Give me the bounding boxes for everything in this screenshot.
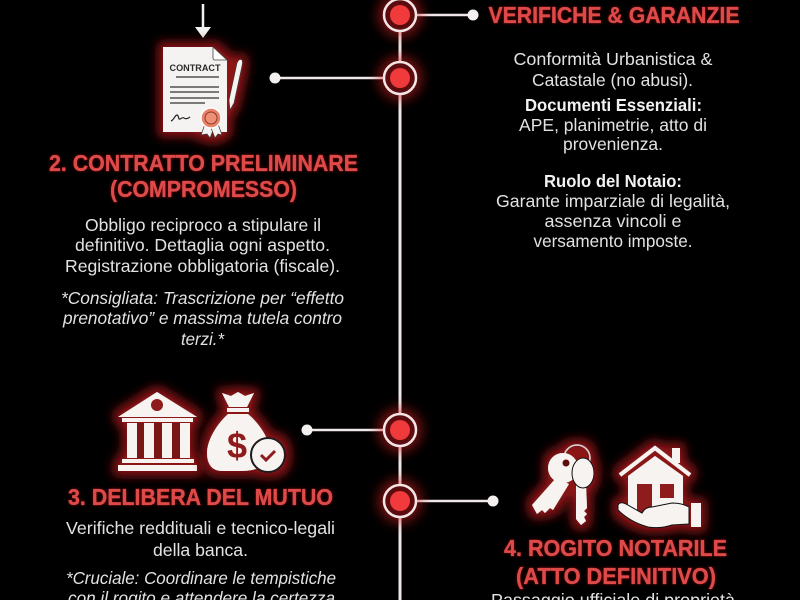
text: step 2 body: Registrazione obbligatoria (fiscale). <box>65 256 340 276</box>
heading: step 4 <box>504 535 727 589</box>
node 3 <box>378 408 422 452</box>
text: step 2 note: *Consigliata: Trascrizione per “effetto <box>61 288 344 308</box>
connector: verifiche <box>400 10 478 20</box>
panel: verifiche e garanzie <box>488 2 740 251</box>
node 1 <box>378 0 422 37</box>
text: step 3 body: Verifiche reddituali e tecnico-legali <box>66 518 335 538</box>
text: ruolo del notaio: Garante imparziale di legalità, <box>496 191 730 211</box>
text: step 3 body <box>66 518 335 560</box>
heading: step 2: 2. CONTRATTO PRELIMINARE <box>49 150 358 176</box>
icon: contract <box>163 47 242 138</box>
text: step 3 note: *Cruciale: Coordinare le tempistiche <box>66 568 336 588</box>
heading: verifiche: VERIFICHE & GARANZIE <box>488 2 740 28</box>
heading: step 2: (COMPROMESSO) <box>110 176 297 202</box>
text: step 2 body: Obbligo reciproco a stipulare il <box>85 215 321 235</box>
connector: delibera <box>302 424 400 436</box>
icon: money bag <box>207 392 285 472</box>
text: ruolo del notaio <box>496 171 730 251</box>
panel: step 3 <box>66 484 336 600</box>
text: step 2 note <box>61 288 344 349</box>
text: documenti <box>519 95 707 154</box>
icon: contract: CONTRACT <box>170 63 221 73</box>
text: step 3 body: della banca. <box>153 540 248 560</box>
text: step 3 note <box>66 568 336 600</box>
text: conformita: Conformità Urbanistica & <box>514 49 713 69</box>
text: step 2 body: definitivo. Dettaglia ogni aspetto. <box>75 235 330 255</box>
text: conformita <box>514 49 713 90</box>
node 2 <box>378 56 422 100</box>
text: conformita: Catastale (no abusi). <box>532 70 693 90</box>
text: documenti: APE, planimetrie, atto di <box>519 115 707 135</box>
text: step 2 body <box>65 215 340 276</box>
text: documenti: Documenti Essenziali: <box>525 95 702 115</box>
heading: step 3: 3. DELIBERA DEL MUTUO <box>68 484 333 510</box>
text: ruolo del notaio: Ruolo del Notaio: <box>544 171 682 191</box>
node 4 <box>378 479 422 523</box>
panel: step 4 <box>491 535 735 600</box>
connector: contratto <box>270 72 400 84</box>
text: ruolo del notaio: versamento imposte. <box>534 231 692 251</box>
icon: bank <box>118 392 197 471</box>
arrow down to contract <box>195 4 211 38</box>
text: documenti: provenienza. <box>563 134 663 154</box>
timeline spine <box>270 0 498 600</box>
heading: step 4: (ATTO DEFINITIVO) <box>516 563 716 589</box>
text: step 2 note: terzi.* <box>181 329 225 349</box>
heading: step 2 <box>49 150 358 202</box>
icon: money bag: $ <box>227 425 247 466</box>
icon: keys <box>532 445 594 525</box>
heading: step 4: 4. ROGITO NOTARILE <box>504 535 727 561</box>
panel: step 2 <box>49 150 358 349</box>
text: step 2 note: prenotativo” e massima tutela contro <box>62 308 342 328</box>
connector: rogito <box>400 496 498 506</box>
icon: house in hand <box>618 448 701 528</box>
text: ruolo del notaio: assenza vincoli e <box>544 211 682 231</box>
